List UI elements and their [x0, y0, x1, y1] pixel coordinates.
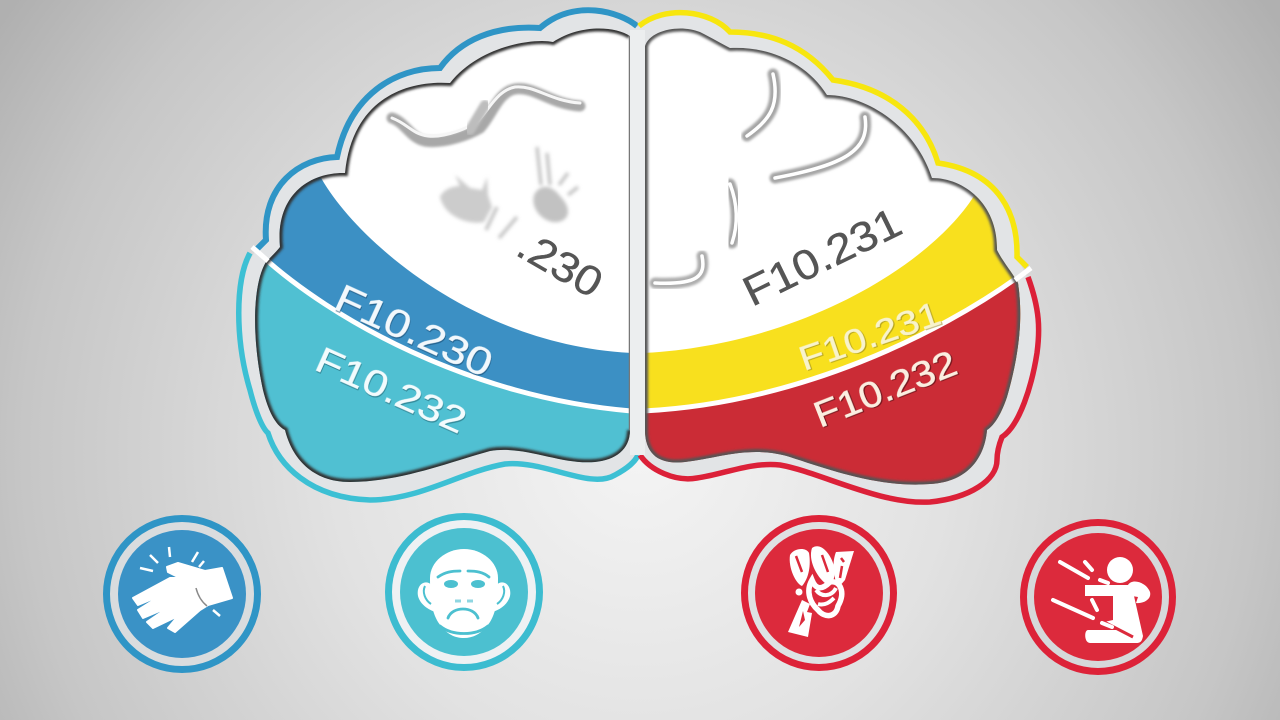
left blue band	[240, 176, 632, 420]
residue strokes	[486, 147, 578, 238]
outline: teal	[239, 253, 638, 500]
left brain folds	[392, 87, 580, 142]
right red band	[645, 282, 1020, 485]
label: F10.232 on red: F10.232	[808, 342, 962, 435]
right white region	[648, 31, 974, 352]
right inner shadow	[645, 28, 1020, 485]
label: partial F10.230 on white: .230	[510, 221, 611, 307]
seam tick right	[1015, 268, 1031, 280]
right white separator	[643, 277, 1018, 411]
outline: red	[640, 277, 1039, 502]
left edge hairline	[628, 36, 630, 430]
left smudge	[440, 175, 492, 223]
outline: blue	[256, 10, 637, 250]
fold: center vertical	[730, 184, 736, 243]
right smudge	[533, 187, 568, 222]
right brain folds	[655, 74, 866, 283]
brain	[239, 10, 1040, 502]
label: F10.232 on teal: F10.232	[310, 339, 473, 441]
right yellow band	[643, 196, 1040, 420]
fold: long curve	[775, 117, 866, 178]
label: F10.230 on blue: F10.230	[328, 277, 499, 386]
fold: upper left	[392, 89, 580, 142]
label: F10.231 on white: F10.231	[735, 198, 909, 315]
fold: middle smear	[470, 105, 485, 130]
left white region	[322, 30, 630, 353]
left teal band	[255, 263, 630, 482]
icon: damaged organs	[744, 518, 894, 668]
icon: person injured	[1024, 522, 1172, 672]
fold: upper short	[747, 74, 775, 136]
label: F10.231 on yellow: F10.231	[794, 295, 946, 379]
left hemisphere	[240, 20, 632, 500]
icon: sad face	[388, 516, 540, 668]
left white separator	[262, 256, 632, 411]
left inner shadow	[255, 28, 630, 482]
center divider	[630, 30, 645, 455]
brain outer plate	[239, 10, 1039, 502]
icon: injured hand	[106, 518, 258, 670]
blurred hand residue	[440, 147, 578, 238]
outline: yellow	[639, 13, 1027, 267]
seam tick left	[252, 247, 268, 261]
fold: lower hook	[655, 256, 703, 283]
right hemisphere	[645, 28, 1020, 485]
